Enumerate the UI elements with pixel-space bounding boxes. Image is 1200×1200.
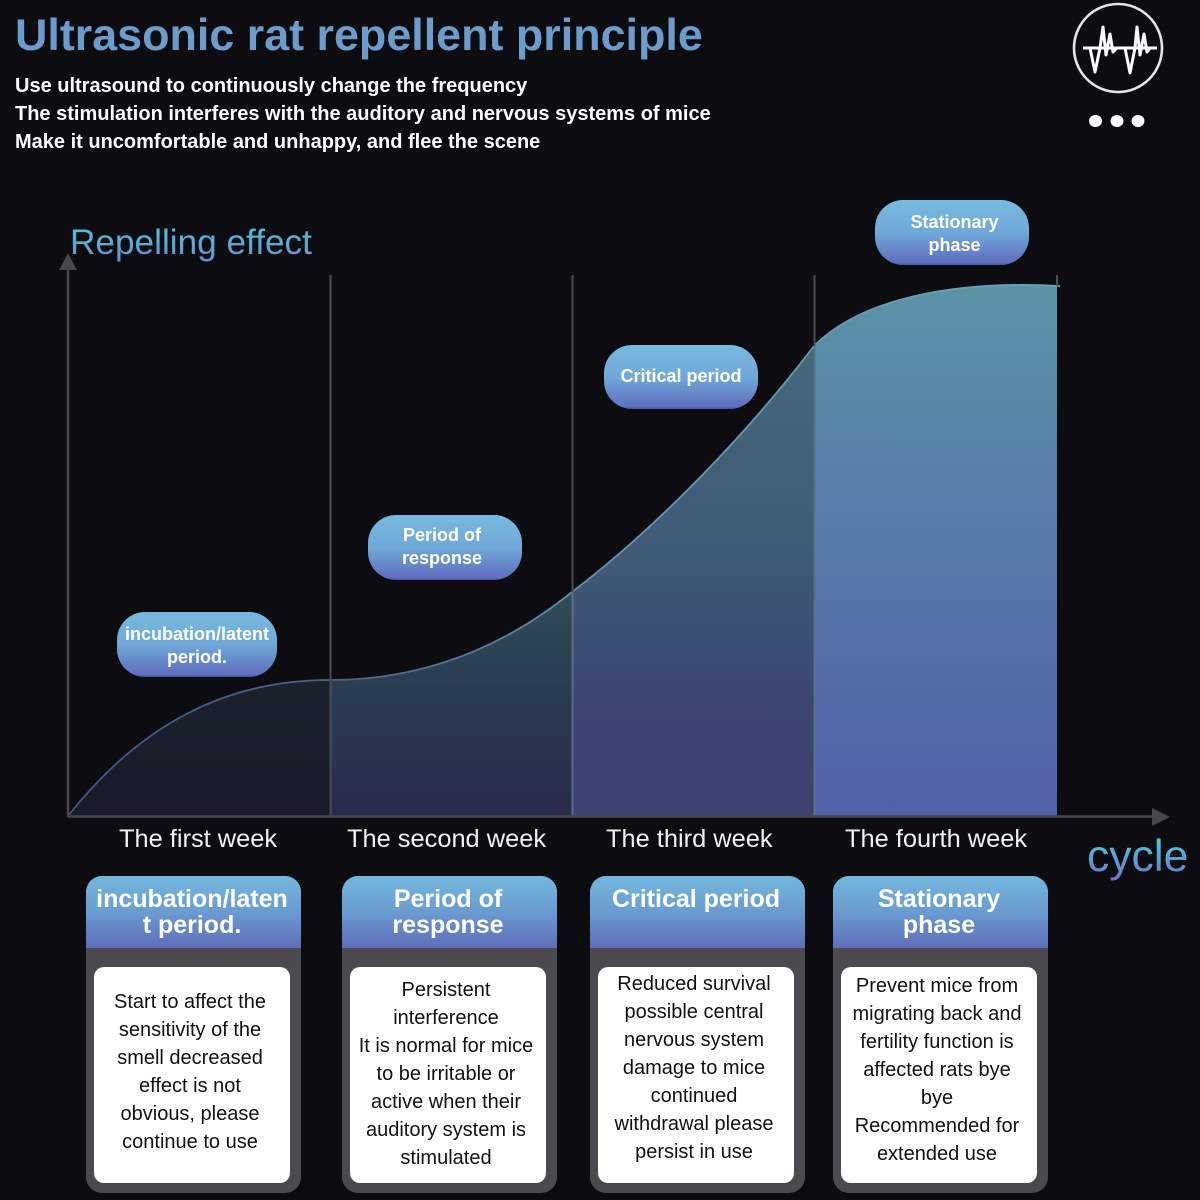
pill: incubation/latent period: period.	[167, 646, 227, 666]
panel heading	[86, 876, 301, 948]
pill: stationary phase	[875, 200, 1029, 265]
panel text: Prevent mice from	[856, 974, 1018, 996]
week label 3: The third week	[606, 825, 773, 853]
panel text: extended use	[877, 1142, 997, 1164]
week dividers	[330, 275, 1057, 816]
panel text	[841, 967, 1037, 1183]
panel text: persist in use	[635, 1140, 753, 1162]
panel heading: response	[392, 910, 504, 938]
intro text: The stimulation interferes with the auditory and nervous systems of mice	[15, 102, 711, 124]
panel text: Start to affect the	[114, 991, 266, 1013]
panel heading: incubation/laten	[96, 885, 288, 913]
panel text: sensitivity of the	[119, 1019, 261, 1041]
panel text: to be irritable or	[377, 1062, 515, 1084]
panel text: damage to mice	[623, 1056, 765, 1078]
panel heading: t period.	[143, 910, 241, 938]
week label 4: The fourth week	[845, 825, 1027, 853]
panel heading	[833, 876, 1048, 948]
area: weekly fills under curve	[68, 285, 1058, 816]
panel heading	[342, 876, 557, 948]
panel heading: phase	[903, 910, 975, 938]
week label 1: The first week	[119, 825, 277, 853]
panel heading: Period of	[394, 885, 502, 913]
panel text: Reduced survival	[617, 972, 771, 994]
icon: sound wave in circle with three dots	[1072, 2, 1164, 127]
x axis label: cycle	[1087, 832, 1188, 881]
week label 2: The second week	[347, 825, 546, 853]
panel text: continued	[651, 1084, 737, 1106]
pill: period of response	[368, 515, 522, 580]
intro text: Make it uncomfortable and unhappy, and flee the scene	[15, 130, 540, 152]
y axis label: Repelling effect	[70, 223, 312, 262]
panel text	[598, 967, 794, 1183]
panel text: auditory system is	[366, 1118, 526, 1140]
intro text	[15, 74, 711, 152]
panel text: bye	[921, 1086, 953, 1108]
panel text: migrating back and	[852, 1002, 1021, 1024]
panel heading: Stationary	[878, 885, 1000, 913]
pill: incubation/latent period: incubation/latent	[125, 624, 269, 644]
panel text: fertility function is	[860, 1030, 1014, 1052]
intro text: Use ultrasound to continuously change the frequency	[15, 74, 527, 96]
panel text: smell decreased	[117, 1047, 263, 1069]
title: Ultrasonic rat repellent principle	[15, 9, 703, 60]
panel text: active when their	[371, 1090, 521, 1112]
panel heading	[590, 876, 805, 948]
panel text: affected rats bye	[863, 1058, 1011, 1080]
panel text: Persistent	[402, 978, 490, 1000]
curve line	[68, 285, 1060, 816]
panel text: interference	[393, 1006, 499, 1028]
x axis with arrow	[68, 808, 1170, 826]
pill: incubation/latent period	[117, 612, 277, 677]
panel text: nervous system	[624, 1028, 764, 1050]
pill: critical period	[604, 345, 758, 409]
panel text: withdrawal please	[614, 1112, 773, 1134]
pill: stationary phase: Stationary	[910, 212, 999, 232]
pill: period of response: Period of	[403, 524, 481, 544]
pill: period of response: response	[402, 548, 482, 568]
panel text: obvious, please	[120, 1103, 259, 1125]
panel: period of response	[342, 876, 557, 1193]
panel heading: Critical period	[612, 885, 780, 913]
panel text	[350, 967, 546, 1183]
growth chart	[59, 223, 1188, 881]
panel text: It is normal for mice	[359, 1034, 533, 1056]
pill: stationary phase: phase	[928, 234, 981, 254]
panel: incubation/latent period	[86, 876, 301, 1193]
panel text: stimulated	[400, 1146, 492, 1168]
y axis with arrow	[59, 253, 77, 817]
panel: stationary phase	[833, 876, 1048, 1193]
panel text	[94, 967, 290, 1183]
panel text: possible central	[625, 1000, 763, 1022]
pill: critical period: Critical period	[620, 366, 742, 386]
panel text: effect is not	[139, 1075, 241, 1097]
panel text: continue to use	[122, 1131, 258, 1153]
panel: critical period	[590, 876, 805, 1193]
panel text: Recommended for	[855, 1114, 1019, 1136]
